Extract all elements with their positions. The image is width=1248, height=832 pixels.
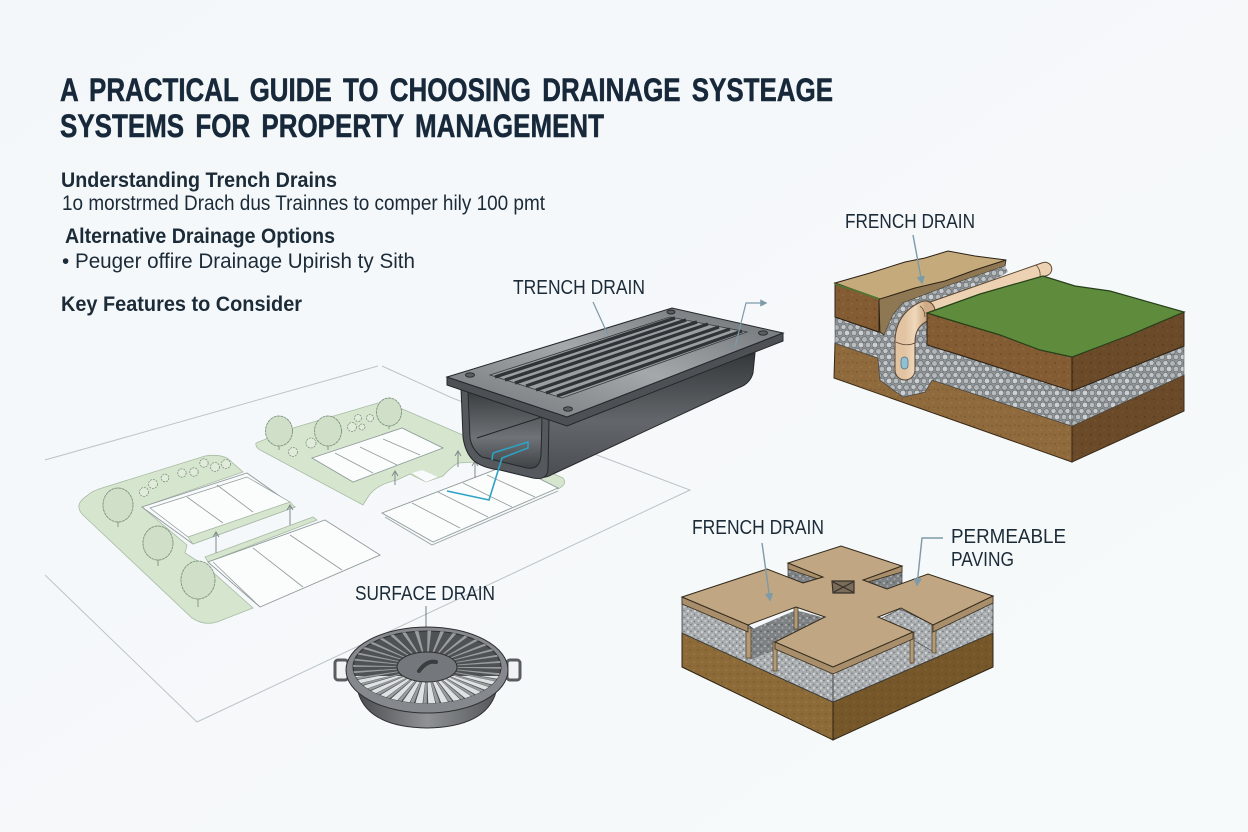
- label: permeable paving: PAVING: [951, 549, 1014, 571]
- parking bay lower right: [382, 464, 558, 545]
- grass surface: [927, 276, 1184, 357]
- see-through gaps in lower grate: [355, 676, 499, 704]
- radial spokes: [375, 642, 479, 692]
- property boundary lines: [45, 366, 690, 722]
- permeable paving pointer: [917, 538, 943, 585]
- french drain illustration: [834, 211, 1184, 462]
- label: french drain: FRENCH DRAIN: [845, 211, 975, 233]
- upper soil front right: [927, 313, 1072, 391]
- center inlet: [832, 581, 854, 593]
- label: permeable paving: PERMEABLE: [951, 526, 1066, 548]
- label: trench drain: TRENCH DRAIN: [513, 277, 645, 299]
- thin grass edge: [835, 284, 879, 299]
- trench end face: [461, 388, 549, 479]
- flange bolts: [466, 310, 768, 411]
- grate slots: [490, 317, 747, 398]
- drain bowl: [358, 692, 496, 728]
- trees: [103, 398, 402, 607]
- front-left notch well: [750, 610, 825, 660]
- parking bay upper right: [312, 428, 443, 482]
- upper soil left: [835, 283, 879, 332]
- gravel front layer: [835, 310, 1072, 426]
- flange top: [447, 308, 783, 417]
- french drain pointer: [913, 235, 922, 283]
- grate recess: [353, 631, 501, 703]
- base soil left face: [682, 633, 833, 740]
- gravel left face: [682, 597, 833, 702]
- center hub: [397, 652, 457, 682]
- bullet: drainage options: • Peuger offire Drainage Upirish ty Sith: [62, 250, 415, 273]
- left green area: [79, 455, 253, 623]
- label: permeable paving: [951, 526, 1066, 571]
- infographic canvas: [44, 78, 1186, 741]
- label: french drain: FRENCH DRAIN: [692, 517, 824, 539]
- trench pointer line: [593, 302, 608, 335]
- right green area: [256, 403, 565, 505]
- title: [60, 72, 833, 144]
- surface drain illustration: [335, 583, 520, 728]
- lower soil layer: [834, 343, 1072, 462]
- french drain pointer: [762, 543, 770, 600]
- flange edge: [447, 333, 783, 426]
- surface drain pointer: [425, 606, 427, 627]
- label: surface drain: SURFACE DRAIN: [355, 583, 495, 605]
- title: SYSTEMS FOR PROPERTY MANAGEMENT: [60, 108, 604, 144]
- hub handle: [419, 662, 436, 671]
- sand surface: [835, 251, 1006, 299]
- gravel right face: [1072, 346, 1184, 426]
- trench wall: [879, 260, 1006, 335]
- trench drain illustration: [447, 277, 783, 500]
- upper soil right face: [1072, 312, 1184, 391]
- drain rim: [346, 627, 508, 713]
- flow arrows on plan: [213, 451, 478, 553]
- drain pipe: [896, 265, 1045, 370]
- body text: trench drains: 1o morstrmed Drach dus Trainnes to comper hily 100 pmt: [62, 192, 545, 215]
- white notch in green area: [412, 470, 438, 482]
- paving cross top: [682, 546, 993, 667]
- lower soil right face: [1072, 375, 1184, 462]
- site plan illustration: [45, 366, 690, 722]
- handles: [335, 660, 520, 680]
- trench outflow arrow: [735, 303, 766, 347]
- gravel right face: [833, 596, 993, 702]
- shrubs: [140, 414, 374, 496]
- gravel along pipe: [884, 266, 1008, 335]
- title: A PRACTICAL GUIDE TO CHOOSING DRAINAGE SYSTEAGE: [60, 72, 833, 108]
- trench opening: [468, 392, 542, 468]
- parking bay lower left: [205, 517, 380, 607]
- trench body side: [543, 353, 755, 477]
- heading: alternative drainage options: Alternative Drainage Options: [65, 225, 335, 248]
- base soil right face: [833, 633, 993, 740]
- back notch wells: [788, 563, 902, 589]
- paving slab edges: [682, 563, 993, 674]
- flow arrow inside trench: [447, 442, 528, 500]
- text block: guide sections: [61, 169, 545, 316]
- heading: understanding trench drains: Understanding Trench Drains: [61, 169, 337, 192]
- parking bay upper left: [142, 473, 295, 544]
- right notch well: [880, 609, 934, 652]
- permeable paving illustration: [682, 517, 1066, 740]
- heading: key features: Key Features to Consider: [61, 293, 302, 316]
- support posts: [746, 607, 936, 671]
